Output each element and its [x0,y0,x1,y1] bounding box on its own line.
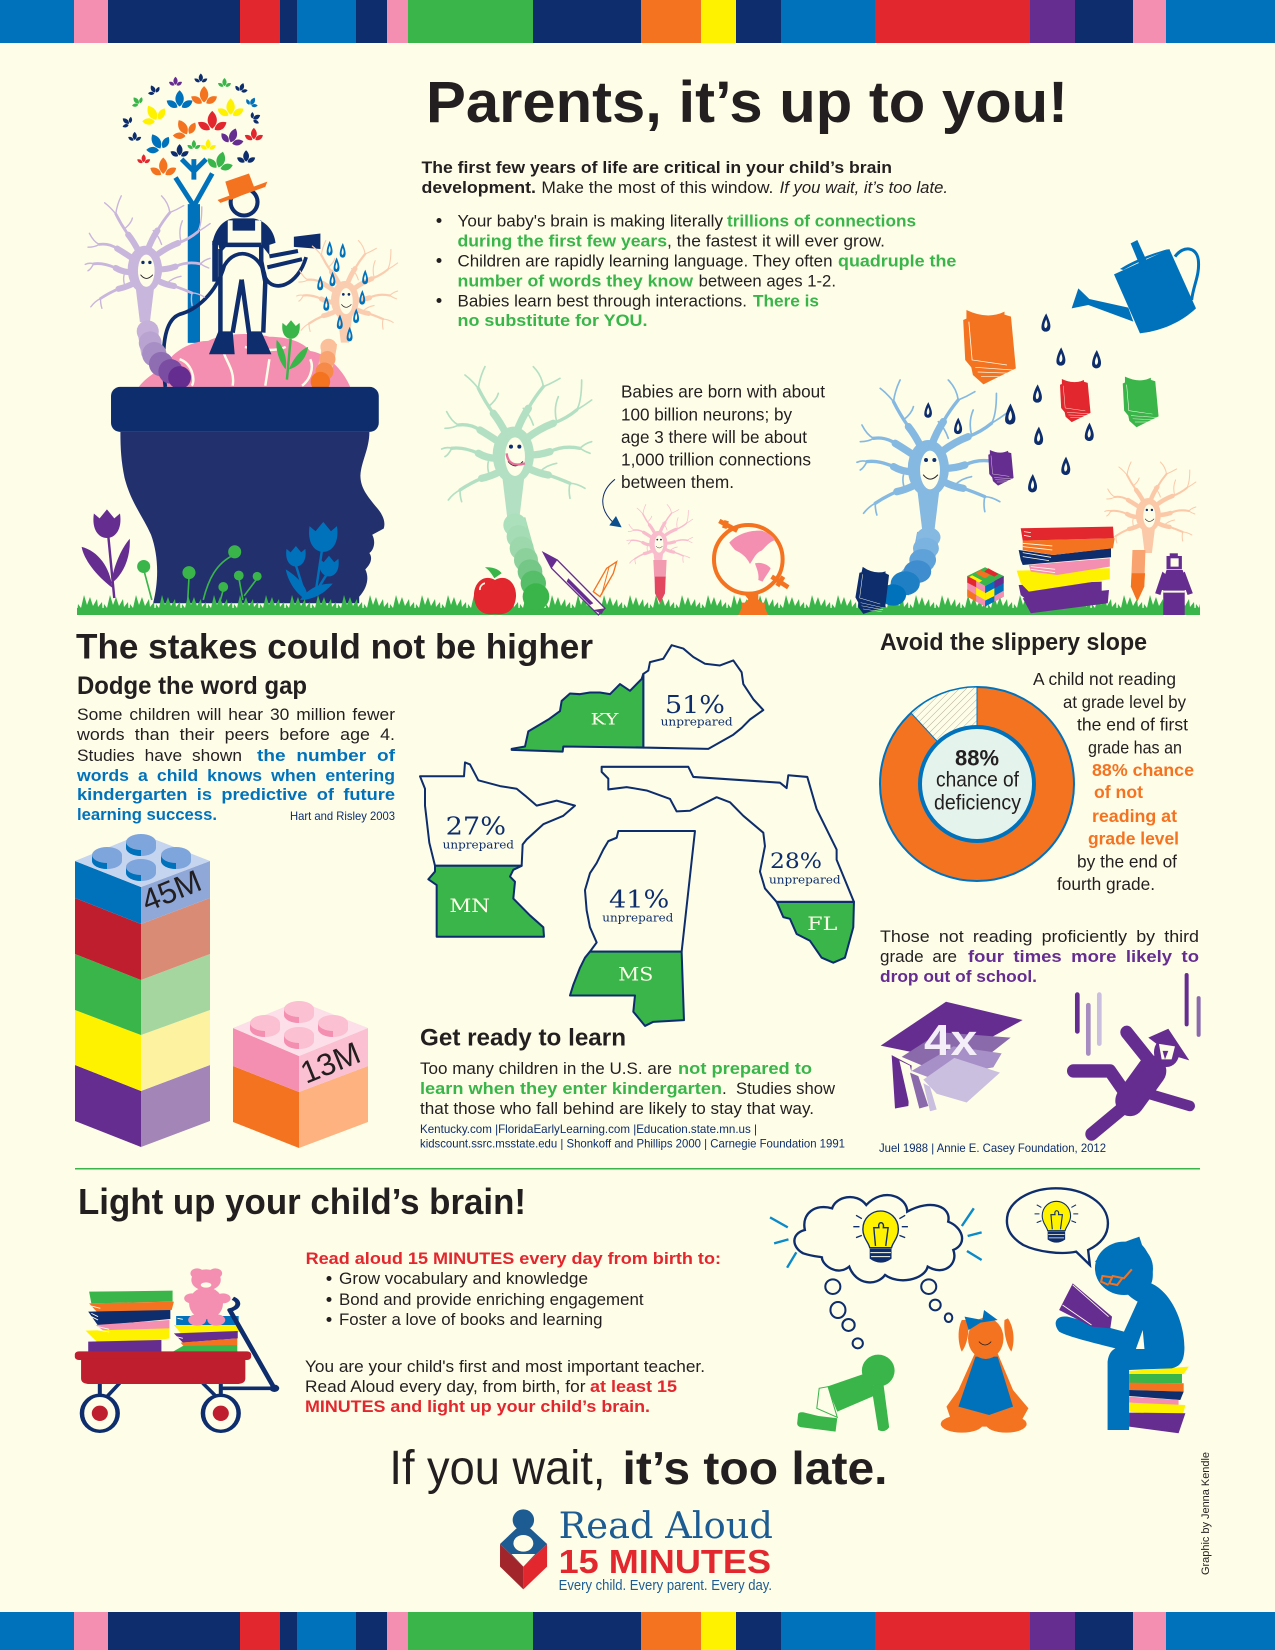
map: Florida 28%: FL [807,914,837,935]
panel: avoid the slippery slope [879,629,1199,1155]
icon: brain [139,334,350,387]
logo: Read Aloud 15 Minutes: 15 MINUTES [559,1543,771,1580]
text: get ready paragraph: that those who fall behind are likely to stay that way. [420,1099,814,1118]
logo: Read Aloud 15 Minutes: Every child. Every parent. Every day. [559,1577,772,1594]
heading: light up your child's brain: Light up your child’s brain! [78,1181,526,1222]
text: reading deficiency wrap: the end of first [1077,714,1188,734]
text: read aloud list: Foster a love of books and learning [339,1310,602,1329]
icon: thought cloud with bulb [770,1195,982,1348]
text: read aloud list: Bond and provide enriching engagement [339,1290,644,1309]
neuron: blue [857,380,1006,606]
text: bullet list on brain development: There is [753,292,819,311]
text: title: Parents, it’s up to you! [426,70,1068,135]
text: read aloud list [306,1249,721,1329]
icon: crawling baby [797,1355,895,1432]
neuron: peach with water drops [297,241,398,391]
text: word gap paragraph: words a child knows when entering [76,766,395,785]
illustration: dropout graphics [881,975,1199,1134]
text: intro paragraph [422,158,948,197]
icon: green sprouts [137,545,262,600]
divider [75,1168,1200,1170]
icon: globe [714,521,788,615]
text: map sources: kidscount.ssrc.msstate.edu | Shonkoff and Phillips 2000 | Carnegie Foundation 1991 [420,1136,845,1150]
text: intro paragraph: If you wait, it’s too late. [780,178,948,197]
text: graphic credit: Graphic by Jenna Kendle [1200,1452,1212,1575]
icon: adult reading on books [1056,1237,1189,1433]
icon: red wagon with books and teddy [75,1268,279,1431]
map: Mississippi 41%: MS [618,965,653,986]
map: Mississippi 41% [570,831,695,1026]
bottom colour stripe [0,1612,1275,1650]
chart: 45M lego tower [75,834,210,1147]
text: reading deficiency wrap: grade level [1088,828,1179,848]
illustration: head flowerpot garden with farmer [82,73,398,603]
neuron: small pink [627,504,693,603]
map: Minnesota 27%: 27% [446,812,506,840]
text: bullet list on brain development: during the first few years [458,232,667,251]
text: get ready paragraph: Too many children in the U.S. are [420,1059,672,1078]
text: first teacher paragraph [305,1357,705,1416]
text: bullet list on brain development: quadruple the [838,252,956,271]
text: closing line: If you wait, [389,1442,605,1495]
icon: speech bubble with bulb [1007,1188,1108,1265]
text: intro paragraph: The first few years of life are critical in your child’s brain [422,158,892,177]
text: map sources: Kentucky.com |FloridaEarlyLearning.com |Education.state.mn.us | [420,1122,757,1136]
icon: head-shaped flowerpot [111,387,384,603]
icon: graduation cap 4x [881,1002,1023,1111]
text: reading deficiency wrap: of not [1094,782,1143,802]
icon: callout arrow [603,479,622,527]
neuron: peach right [1105,462,1196,602]
heading: get ready to learn: Get ready to learn [420,1024,626,1052]
illustration: lawn objects middle [442,367,788,615]
icon: girl sitting [941,1310,1028,1433]
text: dropout paragraph: grade are [880,947,957,966]
icon: lego figure [1155,553,1193,615]
panel: get ready to learn [420,1024,845,1150]
label: 45M: 45M [137,863,206,918]
text: neurons callout: age 3 there will be about [621,427,807,447]
text: get ready paragraph: not prepared to [678,1059,812,1078]
text: word gap paragraph: words than their peers before age 4. [76,725,395,744]
text: word gap paragraph: Studies have shown [77,746,242,765]
text: bullet list on brain development: trillions of connections [727,212,916,231]
text: dropout paragraph: four times more likely to [968,947,1199,966]
text: word gap paragraph: Hart and Risley 2003 [290,809,395,823]
chart: 88% donut: 88% [955,746,999,770]
icon: green tulip in brain [276,320,308,380]
text: dropout paragraph: Those not reading proficiently by third [880,927,1199,946]
text: get ready paragraph: Studies show [736,1079,836,1098]
map: Florida 28%: 28% [770,849,822,874]
text: read aloud list: Grow vocabulary and knowledge [339,1269,588,1288]
panel: state maps [420,645,854,1026]
text: dropout paragraph [880,927,1199,986]
text: bullet list on brain development [436,212,956,330]
text: word gap paragraph: learning success. [77,805,217,824]
text: reading deficiency wrap: at grade level by [1063,692,1186,712]
text: first teacher paragraph: You are your child's first and most important teacher. [305,1357,705,1376]
icon: teddy bear [184,1268,231,1326]
icon: wagon book stacks [86,1291,241,1352]
text: closing line: it’s too late. [622,1442,888,1494]
text: word gap paragraph [76,705,395,824]
neuron: purple [85,196,210,389]
illustration: raining books and neurons right [851,310,1196,617]
icon: wagon body and wheels [75,1298,279,1431]
heading: avoid the slippery slope: Avoid the slippery slope [880,629,1147,656]
icon: blue tulips [286,522,339,600]
text: bullet list on brain development: Children are rapidly learning language. They often [458,252,832,271]
top colour stripe [0,0,1275,43]
text: dropout paragraph: drop out of school. [880,967,1037,986]
text: bullet list on brain development: number of words they know [458,272,694,291]
icon: water drops [924,313,1101,492]
illustration: grass strip [77,591,1200,615]
map: Kentucky 51%: KY [591,710,619,729]
text: reading deficiency wrap [1033,669,1194,894]
heading: the stakes could not be higher: The stakes could not be higher [76,628,593,666]
text: bullet list on brain development: Babies learn best through interactions. [458,292,747,311]
chart: 88% donut: deficiency [934,792,1021,814]
icon: watering can [1072,240,1199,333]
text: intro paragraph: Make the most of this window. [541,178,773,197]
icon: purple tulip [82,509,130,598]
text: get ready paragraph: learn when they enter kindergarten [420,1079,722,1098]
text: get ready paragraph: . [722,1079,727,1098]
text: reading deficiency wrap: by the end of [1077,852,1177,872]
icon: apple [474,567,516,614]
text: first teacher paragraph: MINUTES and light up your child’s brain. [305,1397,650,1416]
text: word gap paragraph: kindergarten is predictive of future [77,785,395,804]
text: neurons callout [621,382,825,492]
text: first teacher paragraph: at least 15 [590,1377,677,1396]
text: bullet list on brain development: no substitute for YOU. [458,311,648,330]
map: Kentucky 51%: 51% [665,691,725,719]
icon: rubik's cube [967,567,1004,607]
text: intro paragraph: development. [422,178,536,197]
text: bullet list on brain development: Your baby's brain is making literally [458,212,723,231]
map: Kentucky 51%: unprepared [661,716,733,729]
map: Mississippi 41%: unprepared [602,911,673,925]
panel: dodge the word gap [76,672,395,824]
text: dropout sources: Juel 1988 | Annie E. Casey Foundation, 2012 [879,1141,1106,1155]
icon: farmer watering with hose [163,173,320,387]
icon: stack of books [1017,527,1115,613]
heading: dodge the word gap: Dodge the word gap [77,672,307,700]
text: bullet list on brain development: between ages 1-2. [699,272,836,291]
chart: 88% donut [880,687,1074,881]
icon: falling graduate [1073,975,1199,1134]
text: reading deficiency wrap: 88% chance [1092,760,1194,780]
text: reading deficiency wrap: A child not reading [1033,669,1176,689]
text: first teacher paragraph: Read Aloud every day, from birth, for [305,1377,586,1396]
map: Florida 28% [602,767,854,963]
text: reading deficiency wrap: grade has an [1088,738,1182,758]
text: reading deficiency wrap: fourth grade. [1057,874,1155,894]
icon: purple crayon [543,553,605,615]
text: word gap paragraph: the number of [257,746,395,765]
label: 13M: 13M [296,1035,365,1090]
map: Mississippi 41%: 41% [609,886,669,914]
icon: logo mark [500,1509,547,1589]
map: Minnesota 27% [420,762,575,937]
text: neurons callout: Babies are born with about [621,382,825,402]
logo: Read Aloud 15 Minutes [500,1506,773,1594]
chart: 13M lego tower [233,1001,368,1148]
map: Kentucky 51% [512,645,763,752]
icon: orange pencil [593,562,617,597]
map: Florida 28%: unprepared [769,873,841,886]
text: read aloud list: Read aloud 15 MINUTES every day from birth to: [306,1249,721,1268]
icon: falling books [851,310,1159,617]
illustration: child thinking and adult reading [770,1188,1189,1433]
text: neurons callout: 100 billion neurons; by [621,405,792,425]
text: bullet list on brain development: , the fastest it will ever grow. [667,232,885,251]
text: word gap paragraph: Some children will hear 30 million fewer [77,705,395,724]
chart: 88% donut: chance of [936,769,1019,792]
icon: graduation cap 4x: 4x [924,1016,978,1065]
text: reading deficiency wrap: reading at [1092,806,1177,826]
icon: colourful leaf tree [118,73,264,343]
panel: light up your child's brain [78,1181,721,1416]
text: closing line [389,1442,888,1495]
logo: Read Aloud 15 Minutes: Read Aloud [559,1506,773,1547]
map: Minnesota 27%: unprepared [443,838,514,852]
text: map sources [420,1122,845,1150]
map: Minnesota 27%: MN [449,896,490,917]
text: neurons callout: 1,000 trillion connections [621,450,811,470]
neuron: green [442,367,592,610]
text: neurons callout: between them. [621,472,734,492]
text: get ready paragraph [420,1059,836,1118]
